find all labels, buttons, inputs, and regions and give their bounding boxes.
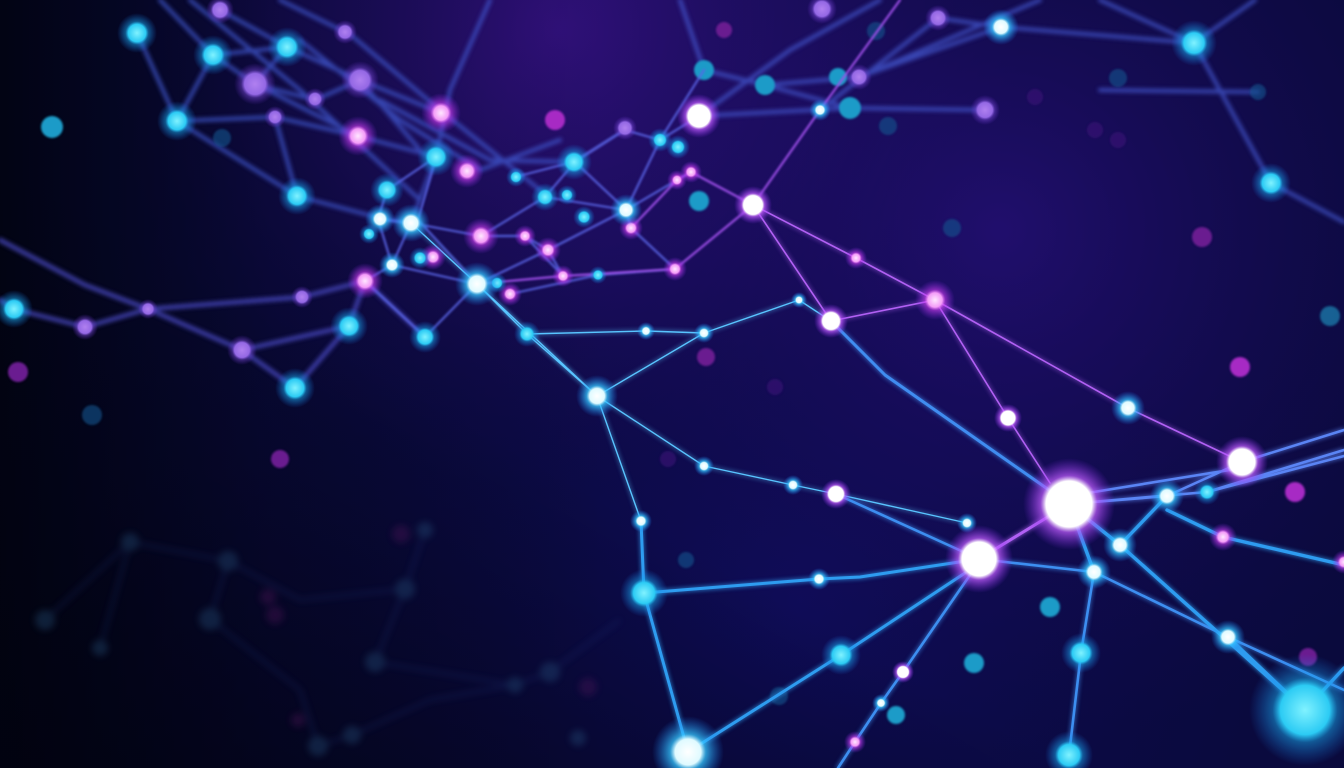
hub node: cyan cluster xyxy=(392,204,430,242)
hub node: left lower cyan xyxy=(620,569,668,617)
upper cluster nodes xyxy=(0,0,1019,408)
main links: thin upper strands xyxy=(411,205,1242,523)
thin strand nodes xyxy=(514,186,977,753)
hub node: top right cyan xyxy=(1171,20,1217,66)
hub node: large white xyxy=(1023,458,1115,550)
hub node: cyan, upper centre xyxy=(455,262,499,306)
main links: thick blue strands xyxy=(641,321,1344,768)
blurred background links, upper region xyxy=(0,0,1344,388)
hub node: cyan centre xyxy=(576,375,618,417)
node: right cyan xyxy=(1251,163,1291,203)
hub node: white, top centre xyxy=(677,94,721,138)
faint out-of-focus network, bottom left xyxy=(35,522,620,756)
right side nodes xyxy=(994,391,1344,768)
hub node: bottom white xyxy=(652,716,724,768)
cluster links, upper centre xyxy=(365,0,900,337)
hub node: violet-white lower xyxy=(945,525,1013,593)
hub node: pink right xyxy=(1216,436,1268,488)
node: bottom cyan xyxy=(821,635,861,675)
hub node: large cyan, bottom right xyxy=(1249,654,1344,766)
